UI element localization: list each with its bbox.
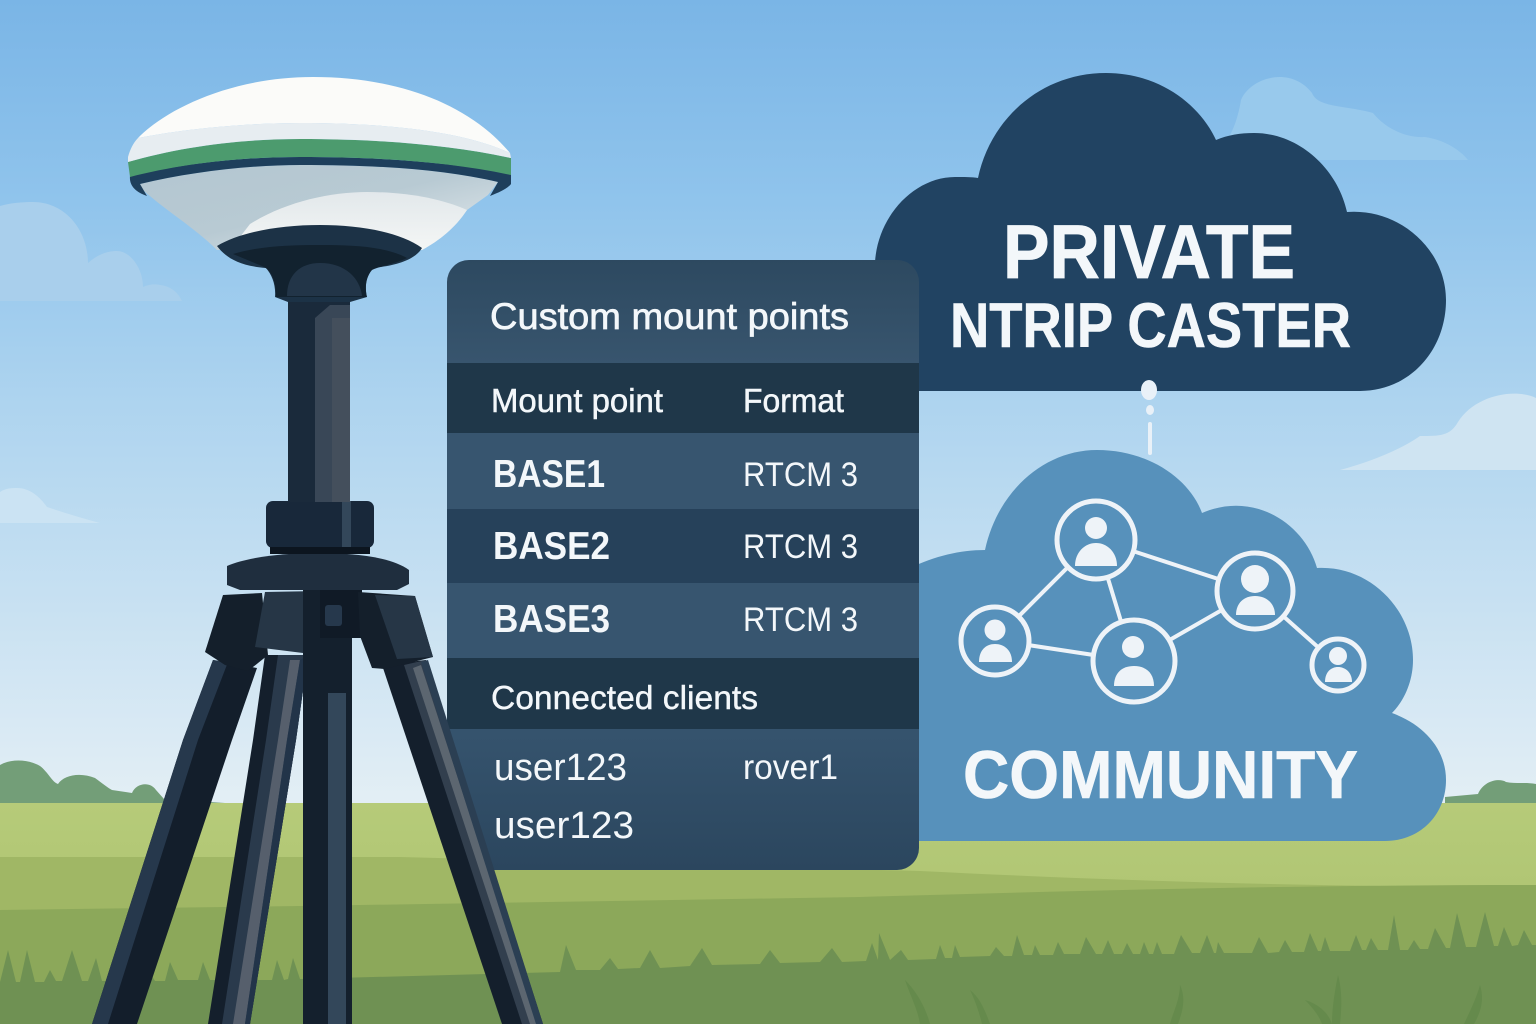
- panel header row: Format: [743, 382, 844, 419]
- title: private: PRIVATE: [1003, 210, 1295, 295]
- dotted connector between clouds: [1141, 380, 1157, 455]
- row: BASE1: RTCM 3: [743, 456, 858, 494]
- antenna white dome: [138, 77, 510, 153]
- connected client list: user123: [494, 747, 627, 789]
- user node 2: [1217, 553, 1293, 629]
- antenna neck shadow: [233, 245, 407, 297]
- cloud shape: [910, 450, 1446, 841]
- antenna cone body: [140, 165, 498, 250]
- title: NTRIP caster: NTRIP CASTER: [950, 291, 1351, 361]
- row: BASE1: [447, 433, 919, 509]
- row: connected clients heading: Connected clients: [491, 679, 758, 716]
- tripod: [92, 296, 543, 1024]
- grass field: [0, 803, 1536, 1024]
- connected client list: user123: [494, 805, 634, 847]
- sky background: [0, 0, 1536, 810]
- row: connected clients heading: [447, 658, 919, 729]
- left leg: [92, 593, 268, 1024]
- antenna neck: [217, 225, 422, 302]
- antenna green band: [128, 139, 511, 177]
- centre leg: [303, 588, 362, 1024]
- grass tufts: [0, 912, 1536, 1024]
- antenna dark rim: [130, 157, 511, 196]
- background clouds: [0, 77, 1536, 523]
- antenna neck boss: [287, 263, 362, 296]
- title: community: COMMUNITY: [963, 737, 1358, 813]
- panel header row: Mount point: [491, 382, 663, 419]
- user node 5: [1312, 639, 1364, 691]
- locking nut: [266, 501, 374, 554]
- pole: [288, 296, 350, 502]
- connected client list: rover1: [743, 748, 838, 787]
- user node 4: [1093, 620, 1175, 702]
- row: BASE2: RTCM 3: [743, 528, 858, 566]
- second leg: [208, 591, 320, 1024]
- row: BASE2: [447, 509, 919, 583]
- row: BASE3: [447, 583, 919, 658]
- row: BASE3: RTCM 3: [743, 601, 858, 639]
- connected client list: [494, 747, 838, 847]
- panel background: [447, 260, 919, 870]
- right leg: [358, 592, 543, 1024]
- panel header row: [447, 363, 919, 433]
- antenna lower highlight: [230, 192, 467, 250]
- mounting plate: [227, 553, 409, 590]
- row: BASE2: BASE2: [493, 525, 610, 568]
- panel: custom mount points table: [447, 260, 919, 870]
- private NTRIP caster cloud: [875, 73, 1446, 391]
- row: BASE3: BASE3: [493, 598, 610, 641]
- network links: [995, 539, 1338, 665]
- antenna light band: [128, 123, 511, 162]
- community cloud: [910, 450, 1446, 841]
- row: BASE1: BASE1: [493, 453, 605, 496]
- user node 1: [1057, 501, 1135, 579]
- panel title: Custom mount points: [490, 296, 849, 337]
- tree line: [0, 761, 1536, 810]
- cloud shape: [875, 73, 1446, 391]
- grass blades: [905, 975, 1482, 1024]
- GNSS antenna: [128, 77, 511, 302]
- user node 3: [961, 607, 1029, 675]
